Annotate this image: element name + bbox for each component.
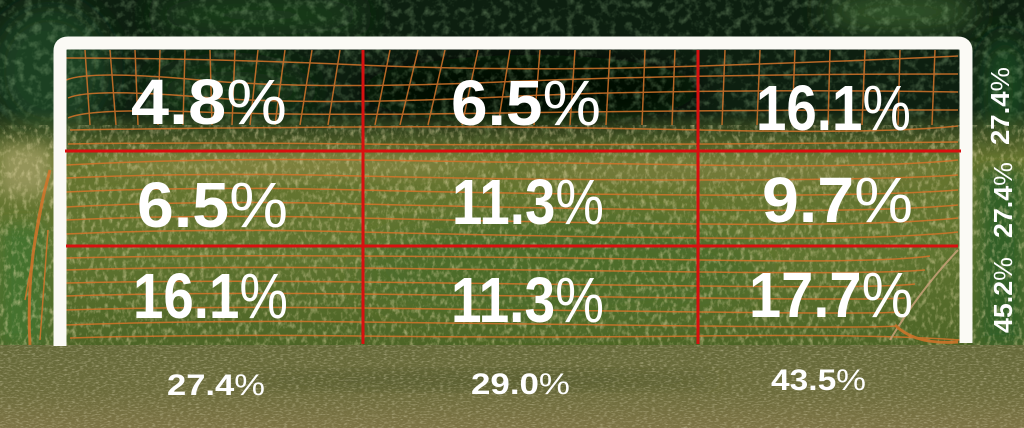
total: top row: 27.4% bbox=[985, 67, 1015, 145]
zone: bottom centre: 11.3% bbox=[451, 264, 604, 336]
goal net bbox=[25, 50, 960, 345]
zone: bottom left: 16.1% bbox=[133, 260, 288, 332]
zone: top centre: 6.5% bbox=[451, 67, 601, 139]
zone: top left: 4.8% bbox=[131, 66, 287, 138]
total: right column: 43.5% bbox=[771, 364, 866, 397]
total: left column: 27.4 % bbox=[167, 369, 265, 402]
total: centre column: 29.0 % bbox=[471, 368, 570, 401]
zone: middle centre: 11.3% bbox=[452, 166, 604, 238]
zone: middle right: 9.7% bbox=[762, 164, 913, 236]
background photo: long grass field bbox=[0, 110, 1024, 347]
column totals bbox=[167, 364, 866, 402]
background photo: trees bbox=[0, 0, 1024, 170]
row totals bbox=[985, 67, 1018, 333]
total: middle row: 27.4% bbox=[988, 162, 1018, 238]
total: bottom row: 45.2% bbox=[988, 257, 1018, 333]
zone: top right: 16.1% bbox=[756, 72, 911, 144]
zone percentages bbox=[131, 66, 913, 336]
zone: middle left: 6.5% bbox=[137, 169, 288, 241]
background photo: mown lawn bbox=[0, 345, 1024, 428]
red grid lines bbox=[65, 50, 961, 344]
zone: bottom right: 17.7% bbox=[749, 259, 913, 331]
goal frame bbox=[60, 43, 966, 346]
